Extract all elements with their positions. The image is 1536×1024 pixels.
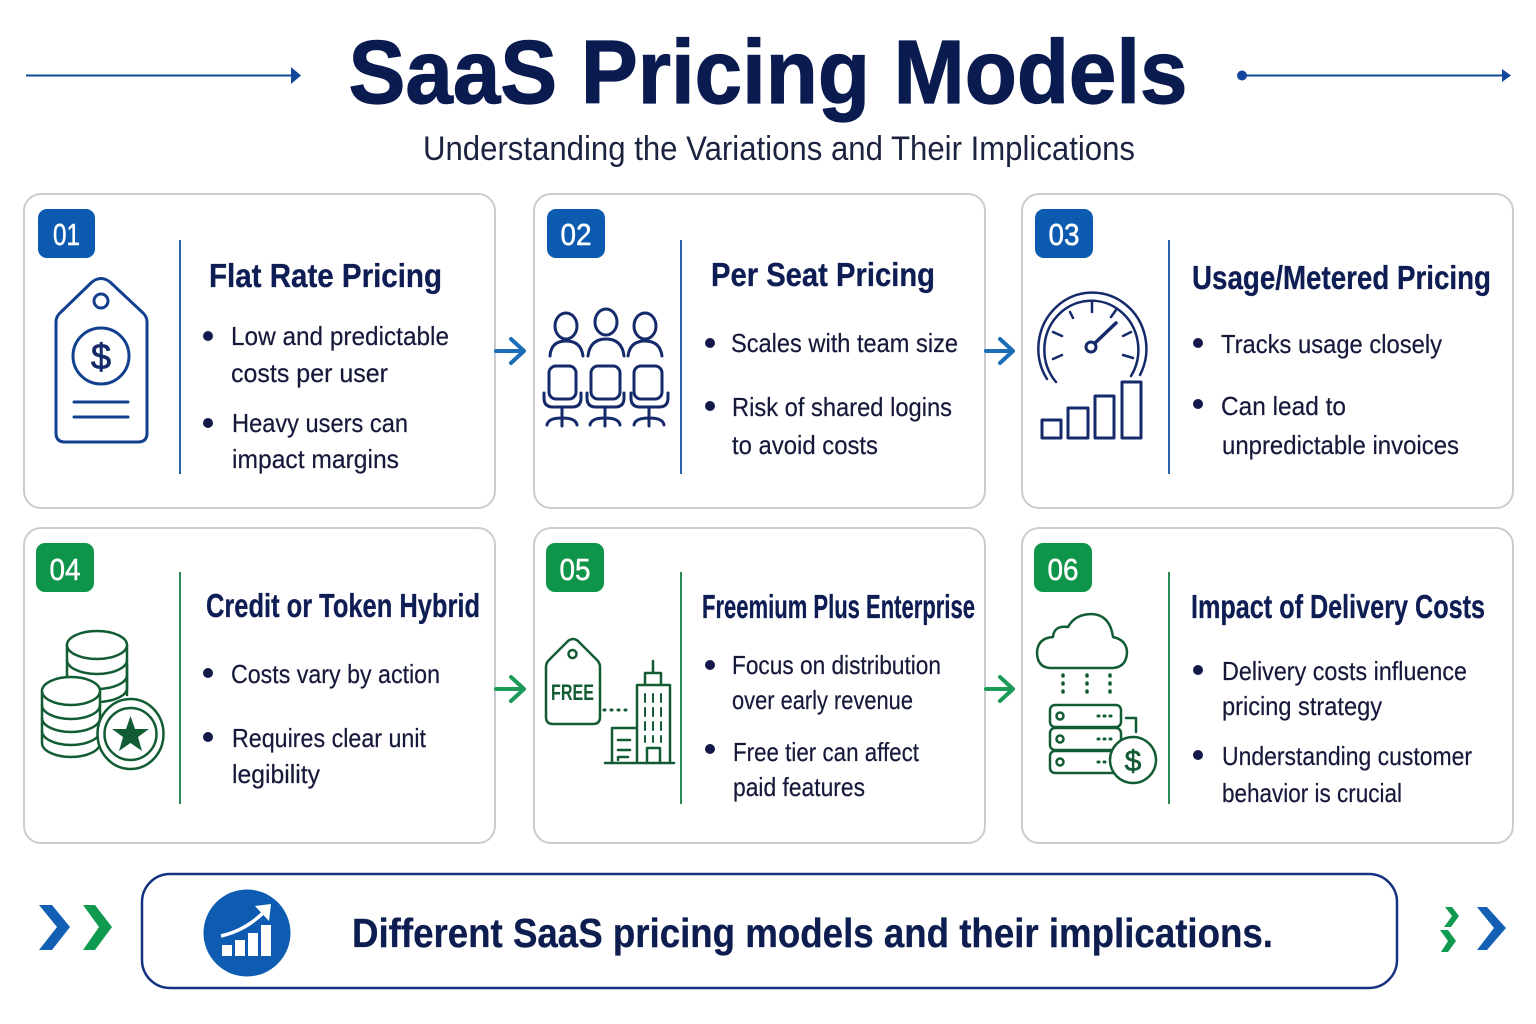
icon: left chevrons — [39, 905, 112, 950]
icon: cloud and servers with cost coin: $ — [1125, 745, 1142, 778]
bullets: unpredictable invoices — [1222, 430, 1459, 460]
arrow: 05 to 06 — [986, 677, 1013, 701]
bullets — [1193, 329, 1459, 460]
badge 03: 03 — [1048, 217, 1080, 252]
bullets: costs per user — [231, 358, 388, 388]
icon: right chevrons — [1440, 907, 1506, 952]
icon: coin stacks with star token — [42, 631, 164, 769]
arrow: 02 to 03 — [986, 339, 1013, 363]
icon: price tag: $ — [91, 336, 111, 377]
bullets: pricing strategy — [1222, 691, 1382, 721]
heading: Freemium Plus Enterprise — [702, 588, 975, 625]
bullets: Heavy users can — [232, 408, 408, 438]
panel: summary banner — [142, 874, 1397, 988]
bullets: Delivery costs influence — [1222, 656, 1467, 686]
icon: free tag and office building: FREE — [551, 680, 594, 705]
badge 05: 05 — [560, 552, 590, 587]
heading: Per Seat Pricing — [711, 256, 935, 293]
arrow: left title arrow — [26, 67, 301, 84]
bullets: behavior is crucial — [1222, 778, 1402, 808]
icon: free tag and office building — [546, 639, 674, 763]
badge 02 — [547, 209, 605, 258]
panel: 06 impact of delivery costs — [1022, 528, 1513, 843]
bullets: Costs vary by action — [231, 659, 440, 689]
title: SaaS Pricing Models — [348, 23, 1188, 123]
arrow: right title arrow — [1237, 69, 1511, 82]
badge 06 — [1034, 543, 1092, 592]
arrow: 01 to 02 — [496, 339, 524, 363]
badge 01: 01 — [53, 217, 80, 252]
heading: Flat Rate Pricing — [209, 257, 442, 294]
bullets: Scales with team size — [731, 328, 958, 358]
panel: 01 flat rate pricing — [24, 194, 495, 508]
badge 03 — [1035, 209, 1093, 258]
badge 05 — [546, 543, 604, 592]
arrow: 04 to 05 — [496, 677, 524, 701]
subtitle: Understanding the Variations and Their Implications — [423, 130, 1135, 168]
heading: Credit or Token Hybrid — [206, 587, 480, 624]
bullets: Can lead to — [1221, 391, 1346, 421]
icon: cloud and servers with cost coin — [1037, 614, 1156, 783]
bullets: Low and predictable — [231, 321, 449, 351]
badge 01 — [38, 209, 95, 258]
bullets — [1193, 656, 1472, 808]
bullets — [705, 650, 941, 802]
badge 06: 06 — [1048, 552, 1078, 587]
bullets — [705, 328, 958, 460]
icon: people in seats — [544, 309, 668, 426]
bullets: legibility — [232, 759, 320, 789]
panel: 04 credit or token hybrid — [24, 528, 495, 843]
bullets: Risk of shared logins — [732, 392, 952, 422]
bullets: to avoid costs — [732, 430, 878, 460]
badge 04 — [36, 543, 94, 592]
bullets: paid features — [733, 772, 865, 802]
bullets: over early revenue — [732, 685, 913, 715]
bullets: impact margins — [232, 444, 399, 474]
bullets: Tracks usage closely — [1221, 329, 1442, 359]
badge 02: 02 — [560, 217, 592, 252]
bullets — [203, 659, 440, 789]
panel: 02 per seat pricing — [534, 194, 985, 508]
summary text: Different SaaS pricing models and their implications. — [352, 910, 1273, 956]
icon: price tag — [56, 278, 147, 442]
panel: 05 freemium plus enterprise — [534, 528, 985, 843]
badge 04: 04 — [50, 552, 80, 587]
bullets: Requires clear unit — [232, 723, 427, 753]
bullets: Free tier can affect — [733, 737, 920, 767]
icon: growth chart badge — [204, 890, 290, 976]
bullets: Understanding customer — [1222, 741, 1472, 771]
bullets — [203, 321, 449, 474]
panel: 03 usage metered pricing — [1022, 194, 1513, 508]
icon: gauge and bars — [1038, 293, 1146, 438]
bullets: Focus on distribution — [732, 650, 941, 680]
